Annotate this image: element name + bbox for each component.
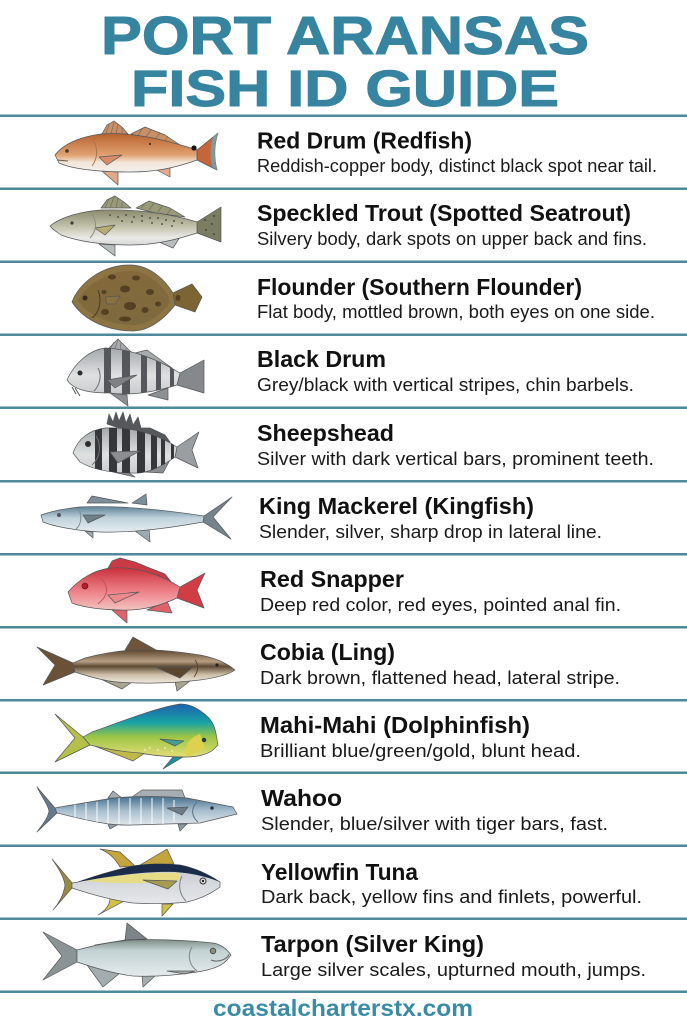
fish: yellowfin tuna [52,849,220,916]
row: Flounder [72,265,655,331]
row: Tarpon [43,923,646,987]
fish: black drum [67,339,204,406]
description: Deep red color, red eyes, pointed anal fin. [260,594,621,615]
row: Speckled Trout [50,196,647,256]
name: King Mackerel (Kingfish) [259,493,534,519]
fish: mahi-mahi [55,704,218,769]
fish: speckled trout [50,196,221,256]
row: Wahoo [37,785,608,834]
description: Brilliant blue/green/gold, blunt head. [260,740,581,761]
row: Red Snapper [68,558,621,623]
name: Wahoo [261,785,342,811]
row: Cobia [37,637,620,691]
row: King Mackerel [41,493,602,542]
fish: cobia [37,637,235,691]
name: Flounder (Southern Flounder) [257,274,582,300]
description: Dark back, yellow fins and finlets, powerful. [261,886,642,907]
row: Black Drum [67,339,634,406]
name: Mahi-Mahi (Dolphinfish) [260,712,530,738]
name: Red Snapper [260,566,404,592]
name: Black Drum [257,346,386,372]
row: Mahi-Mahi [55,704,581,769]
description: Silvery body, dark spots on upper back and fins. [257,228,647,249]
description: Reddish-copper body, distinct black spot near tail. [257,155,657,176]
title: FISH ID GUIDE [131,60,559,117]
fish: tarpon [43,923,231,987]
description: Slender, silver, sharp drop in lateral line. [259,521,602,542]
name: Red Drum (Redfish) [257,128,472,154]
name: Sheepshead [257,420,394,446]
fish: wahoo [37,787,237,832]
name: Yellowfin Tuna [261,859,418,885]
row: Yellowfin Tuna [52,849,642,916]
fish: sheepshead [73,412,199,477]
row: Sheepshead [73,412,654,477]
title [101,6,589,117]
description: Dark brown, flattened head, lateral stripe. [260,667,620,688]
description: Slender, blue/silver with tiger bars, fast. [261,813,608,834]
footer url: coastalcharterstx.com [213,995,473,1021]
fish: red drum [55,121,218,185]
name: Cobia (Ling) [260,639,395,665]
fish: red snapper [68,558,205,623]
fish: king mackerel [41,494,232,542]
fish: flounder [72,265,202,331]
name: Tarpon (Silver King) [261,931,484,957]
description: Flat body, mottled brown, both eyes on one side. [257,301,655,322]
name: Speckled Trout (Spotted Seatrout) [257,200,631,226]
title: PORT ARANSAS [101,6,589,66]
description: Silver with dark vertical bars, prominent teeth. [257,448,654,469]
description: Large silver scales, upturned mouth, jumps. [261,959,646,980]
row: Red Drum [55,121,657,185]
description: Grey/black with vertical stripes, chin barbels. [257,374,634,395]
